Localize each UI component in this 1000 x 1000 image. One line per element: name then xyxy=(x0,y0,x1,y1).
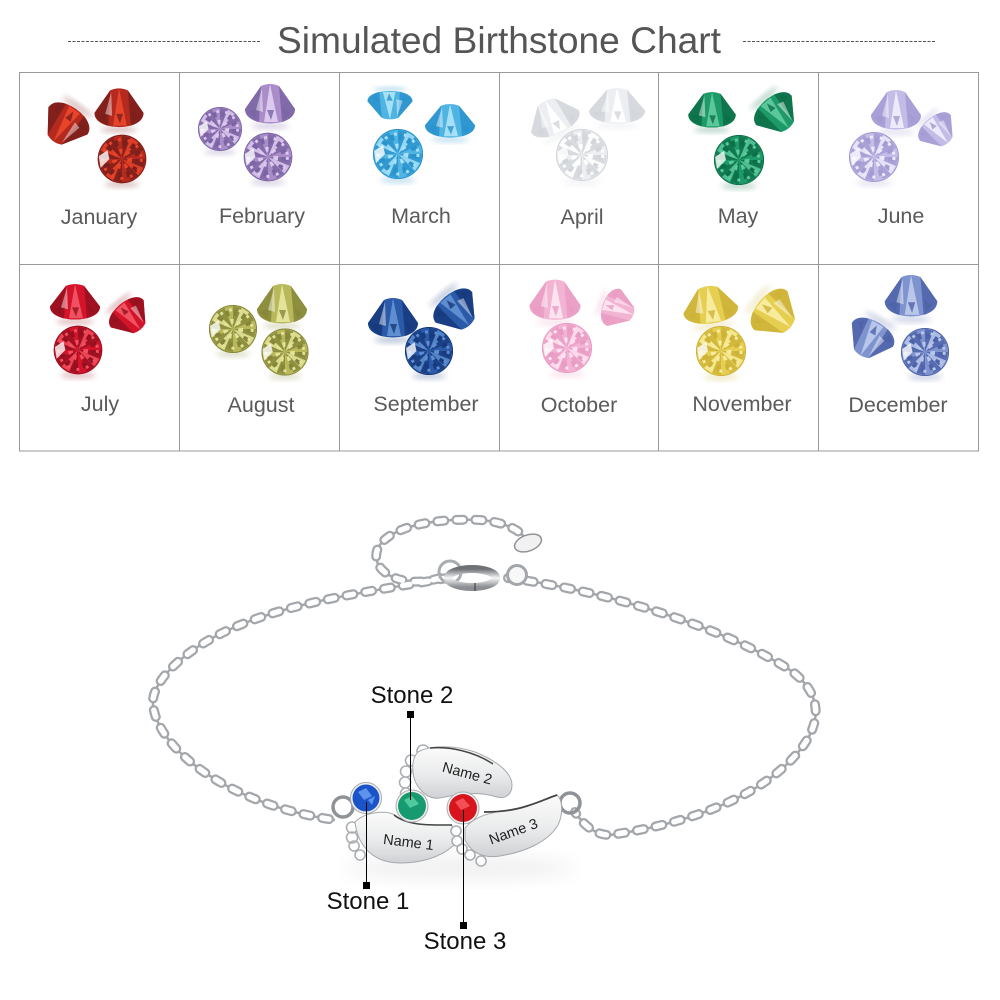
cell: October: October xyxy=(541,393,617,417)
callout: Stone 1 xyxy=(327,802,409,915)
cell: November xyxy=(680,278,807,416)
chain: main and extension xyxy=(153,520,816,835)
cell: September: September xyxy=(373,392,479,416)
panel: birthstone chart grid xyxy=(20,72,979,451)
bracelet illustration xyxy=(153,520,816,879)
foot: Name 1 xyxy=(347,812,457,863)
callout: Stone 1: Stone 1 xyxy=(327,888,409,915)
jump rings xyxy=(560,793,580,813)
stone 1 setting: blue xyxy=(350,782,382,814)
cell: October xyxy=(530,280,640,417)
callout: Stone 2: Stone 2 xyxy=(371,682,453,709)
cell: May: May xyxy=(718,204,759,228)
cell: January: January xyxy=(61,205,137,229)
cell: January xyxy=(34,88,146,229)
cell: June xyxy=(849,90,963,228)
icon: spring clasp xyxy=(439,561,526,591)
callout: Stone 3: Stone 3 xyxy=(424,928,506,955)
cell: July xyxy=(50,284,157,416)
cell: August: August xyxy=(228,393,294,417)
cell: June: June xyxy=(878,204,924,228)
icon: chain tag xyxy=(512,531,544,555)
callout: Stone 2 xyxy=(371,682,453,800)
cell: February xyxy=(198,84,305,228)
cell: July: July xyxy=(81,392,119,416)
cell: March xyxy=(368,87,475,228)
cell: December xyxy=(840,275,949,417)
foot: Name 1: Name 1 xyxy=(382,832,435,854)
cell: May xyxy=(688,82,806,228)
foot: Name 3: Name 3 xyxy=(487,816,540,848)
cell: February: February xyxy=(219,204,305,228)
cell: August xyxy=(209,284,308,417)
cell: April: April xyxy=(560,205,604,229)
foot: Name 2 xyxy=(400,745,512,799)
stone 2 setting: green xyxy=(396,790,428,822)
foot: Name 2: Name 2 xyxy=(440,760,494,788)
title: Simulated Birthstone Chart xyxy=(277,20,722,61)
callout: Stone 3 xyxy=(424,810,506,955)
cell: December: December xyxy=(848,393,948,417)
cell: September xyxy=(368,278,487,416)
cell: April xyxy=(522,88,645,229)
cell: March: March xyxy=(391,204,451,228)
foot: Name 3 xyxy=(451,795,562,866)
shadow under pendant xyxy=(345,857,575,879)
stone 3 setting: red xyxy=(447,792,479,824)
cell: November: November xyxy=(692,392,792,416)
